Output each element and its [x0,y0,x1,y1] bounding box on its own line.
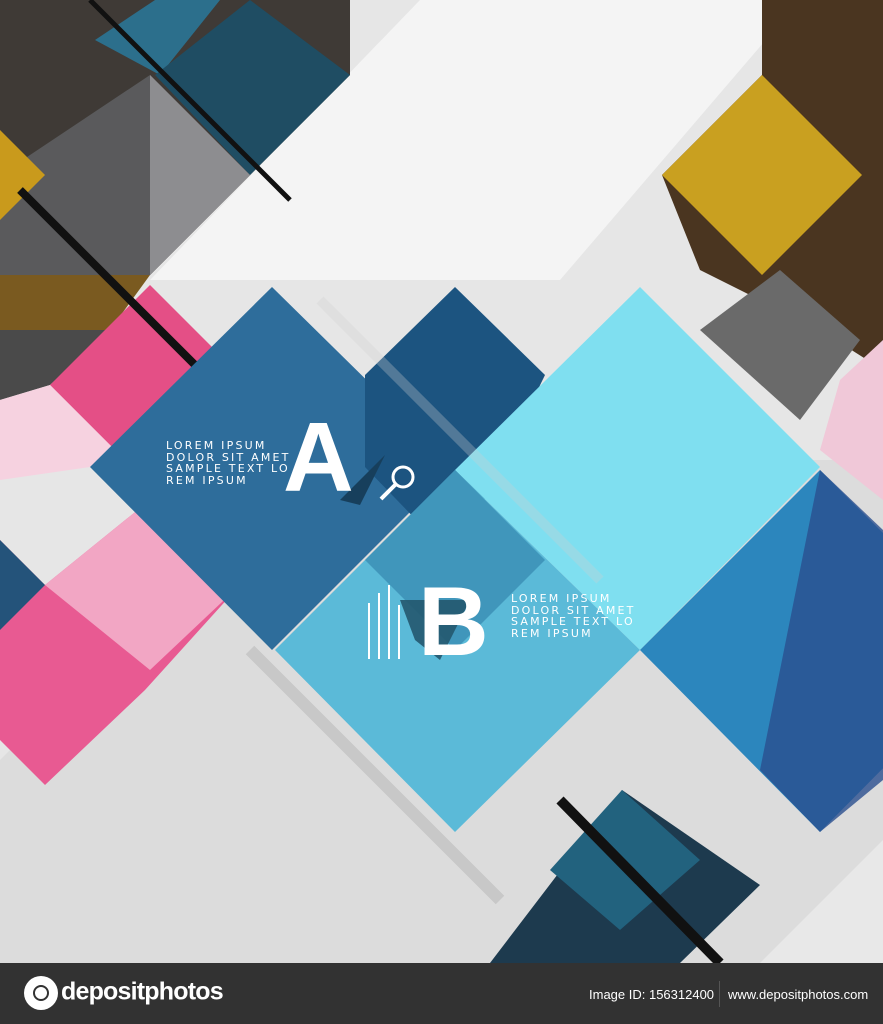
icon: bars [368,585,400,659]
cyan diamond [455,287,820,650]
footer bar [0,963,883,1024]
text block A: DOLOR SIT AMET [166,451,291,464]
right blue diamond [640,470,883,832]
logo: depositphotos [61,978,223,1006]
letter B: B [418,566,489,676]
middle navy [365,287,545,560]
bottom dark diamond [490,790,760,963]
logo [24,976,223,1010]
text block B: REM IPSUM [511,627,593,640]
text block A [166,439,291,487]
text block A: SAMPLE TEXT LO [166,462,290,475]
text block B: SAMPLE TEXT LO [511,615,635,628]
B diamond [275,470,640,832]
top-left cluster [0,0,350,480]
left pink [0,500,240,785]
text block B: LOREM IPSUM [511,592,612,605]
icon: magnifier [380,466,414,500]
diamond A [90,287,455,650]
website: www.depositphotos.com [728,987,868,1002]
text block B [511,592,636,640]
image id: Image ID: 156312400 [589,987,714,1002]
text block A: REM IPSUM [166,474,248,487]
divider [719,981,720,1007]
letter shadows [340,455,385,505]
top-right cluster [662,0,883,370]
grey bars [250,650,500,900]
text block A: LOREM IPSUM [166,439,267,452]
text block B: DOLOR SIT AMET [511,604,636,617]
letter A: A [283,402,354,512]
